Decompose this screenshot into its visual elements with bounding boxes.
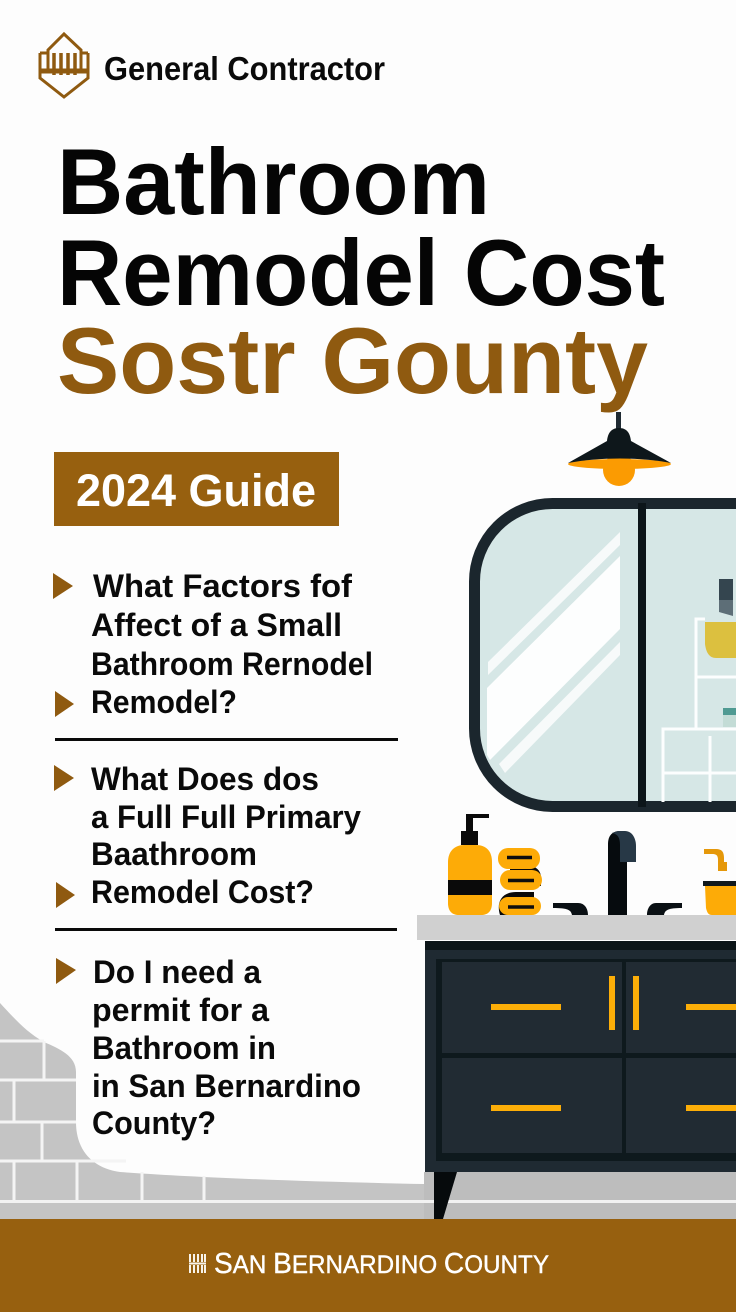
footer band: SAN BERNARDINO COUNTY (214, 1248, 549, 1280)
footer band (0, 1219, 736, 1312)
question list 2: Remodel Cost? (91, 874, 314, 910)
vanity (417, 915, 736, 1219)
question list 3: County? (92, 1105, 216, 1141)
year badge (54, 452, 339, 526)
question list 3: Bathroom in (92, 1030, 276, 1066)
question list 3: Do I need a (93, 954, 262, 990)
question list 1: Bathroom Rernodel (91, 646, 373, 682)
question list 1: Affect of a Small (91, 607, 342, 643)
question list 1: What Factors fof (93, 568, 352, 604)
question list 2: Baathroom (91, 836, 257, 872)
question list 1 (53, 568, 373, 720)
question list 3: permit for a (92, 992, 270, 1028)
question list 2: What Does dos (91, 761, 319, 797)
stacked towels (498, 848, 542, 915)
year badge: 2024 Guide (76, 465, 316, 516)
title: Sostr Gounty (57, 308, 648, 413)
question list 1: Remodel? (91, 684, 237, 720)
logo icon (40, 34, 88, 97)
brand name: General Contractor (104, 50, 385, 87)
question list 3: in San Bernardino (92, 1068, 361, 1104)
mirror (474, 503, 736, 807)
title: Bathroom (57, 129, 490, 234)
cup with brush (703, 849, 736, 915)
faucet (553, 831, 682, 915)
question list 2 (54, 761, 361, 910)
question list 3 (56, 954, 361, 1141)
soap bottle (448, 814, 492, 915)
title: Remodel Cost (57, 220, 665, 325)
brick wall and floor (0, 1003, 736, 1219)
title (57, 129, 665, 413)
question list 2: a Full Full Primary (91, 799, 361, 835)
pendant lamp (568, 412, 671, 486)
